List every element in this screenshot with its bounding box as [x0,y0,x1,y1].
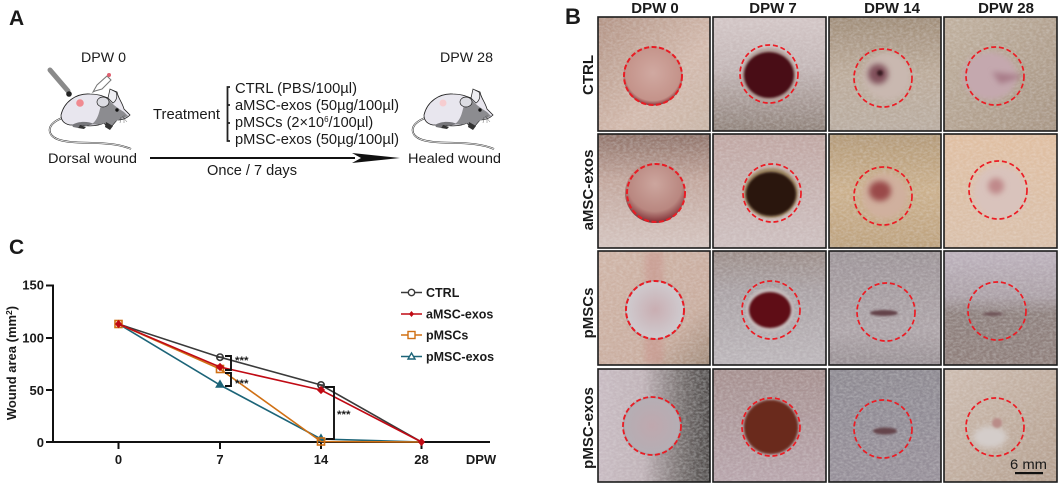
label: DPW 0: DPW 0 [81,49,126,65]
photo: aMSC-exos DPW 0 [598,134,710,248]
significance stars: *** [235,378,249,390]
treatment bracket [228,87,230,141]
series: CTRL [118,324,422,442]
panel label A: A [9,7,24,30]
photo: CTRL DPW 28 [944,17,1057,131]
photo: pMSCs DPW 0 [598,251,710,365]
photo: CTRL DPW 7 [713,17,826,131]
legend: pMSCs: pMSCs [426,328,468,342]
panel B: wound photographs [565,0,1057,482]
bracket: DPW 7 lower [225,373,231,386]
treatment groups list [235,81,399,148]
label: Treatment: Treatment [153,107,220,123]
axes [46,284,490,449]
bracket: DPW 14 [325,387,334,439]
panel label C: C [9,236,24,259]
treatment groups list: aMSC-exos (50µg/100µl) [235,98,399,114]
treatment groups list: /100µl) [329,115,373,131]
x axis tick labels: 28 [414,452,429,467]
y axis tick labels [22,278,44,450]
photo: pMSC-exos DPW 7 [713,369,826,482]
photo: aMSC-exos DPW 7 [713,134,826,248]
photo: pMSC-exos DPW 28 [944,369,1057,482]
significance stars [235,355,351,421]
x axis tick labels [115,452,497,467]
x axis tick labels: 7 [216,452,224,467]
y axis tick labels: 50 [30,383,44,398]
treatment groups list: pMSC-exos (50µg/100µl) [235,132,399,148]
row headers: aMSC-exos [580,150,597,230]
y axis tick labels: 0 [37,435,44,450]
x axis tick labels: 14 [314,452,329,467]
significance stars: *** [235,355,249,367]
arrow: timeline [150,153,400,163]
photo: pMSCs DPW 14 [829,251,941,365]
icon: biopsy punch [50,70,72,97]
y axis title: 2 [4,310,14,315]
row headers [580,55,597,469]
icon: syringe [93,73,111,92]
photo: CTRL DPW 0 [598,17,710,131]
series: aMSC-exos [116,321,424,445]
photo: aMSC-exos DPW 28 [944,134,1057,248]
photo: pMSCs DPW 28 [944,251,1057,365]
label: Dorsal wound: Dorsal wound [48,150,137,166]
icon: healed mouse [413,89,494,149]
photo: aMSC-exos DPW 14 [829,134,941,248]
column headers: DPW 0 [631,0,679,17]
legend: pMSC-exos: pMSC-exos [426,350,494,364]
legend [401,286,494,364]
column headers: DPW 28 [978,0,1034,17]
significance stars: *** [337,409,351,421]
legend: aMSC-exos: aMSC-exos [426,308,493,322]
photo: pMSCs DPW 7 [713,251,826,365]
y axis tick labels: 100 [22,330,44,346]
treatment groups list: 6 [324,115,329,124]
x axis tick labels: 0 [115,452,122,467]
series: pMSCs [115,320,422,445]
row headers: pMSCs [580,288,597,338]
column headers [631,0,1034,17]
scale bar: 6 mm: 6 mm [1010,456,1047,472]
y axis title: ) [4,306,19,310]
photo: pMSC-exos DPW 0 [598,369,710,482]
label: Once / 7 days: Once / 7 days [207,163,297,179]
row headers: CTRL [580,55,597,95]
icon: wounded mouse [50,89,131,149]
treatment groups list: pMSCs (2×10 [235,115,324,131]
label: DPW 28: DPW 28 [440,49,493,65]
row headers: pMSC-exos [580,387,597,469]
y axis title: Wound area (mm [4,315,19,420]
series: pMSC-exos [118,324,422,442]
x axis tick labels: DPW [466,452,497,467]
column headers: DPW 7 [749,0,797,17]
y axis tick labels: 150 [22,278,44,292]
panel A: experimental schedule [9,7,501,179]
column headers: DPW 14 [864,0,921,17]
photo: pMSC-exos DPW 14 [829,369,941,482]
legend: CTRL: CTRL [426,286,460,300]
bracket: DPW 7 upper [225,356,231,370]
treatment groups list: CTRL (PBS/100µl) [235,81,357,97]
photo: CTRL DPW 14 [829,17,941,131]
panel C: wound area chart [4,236,497,467]
panel label B: B [565,4,581,29]
label: Healed wound: Healed wound [408,150,501,166]
